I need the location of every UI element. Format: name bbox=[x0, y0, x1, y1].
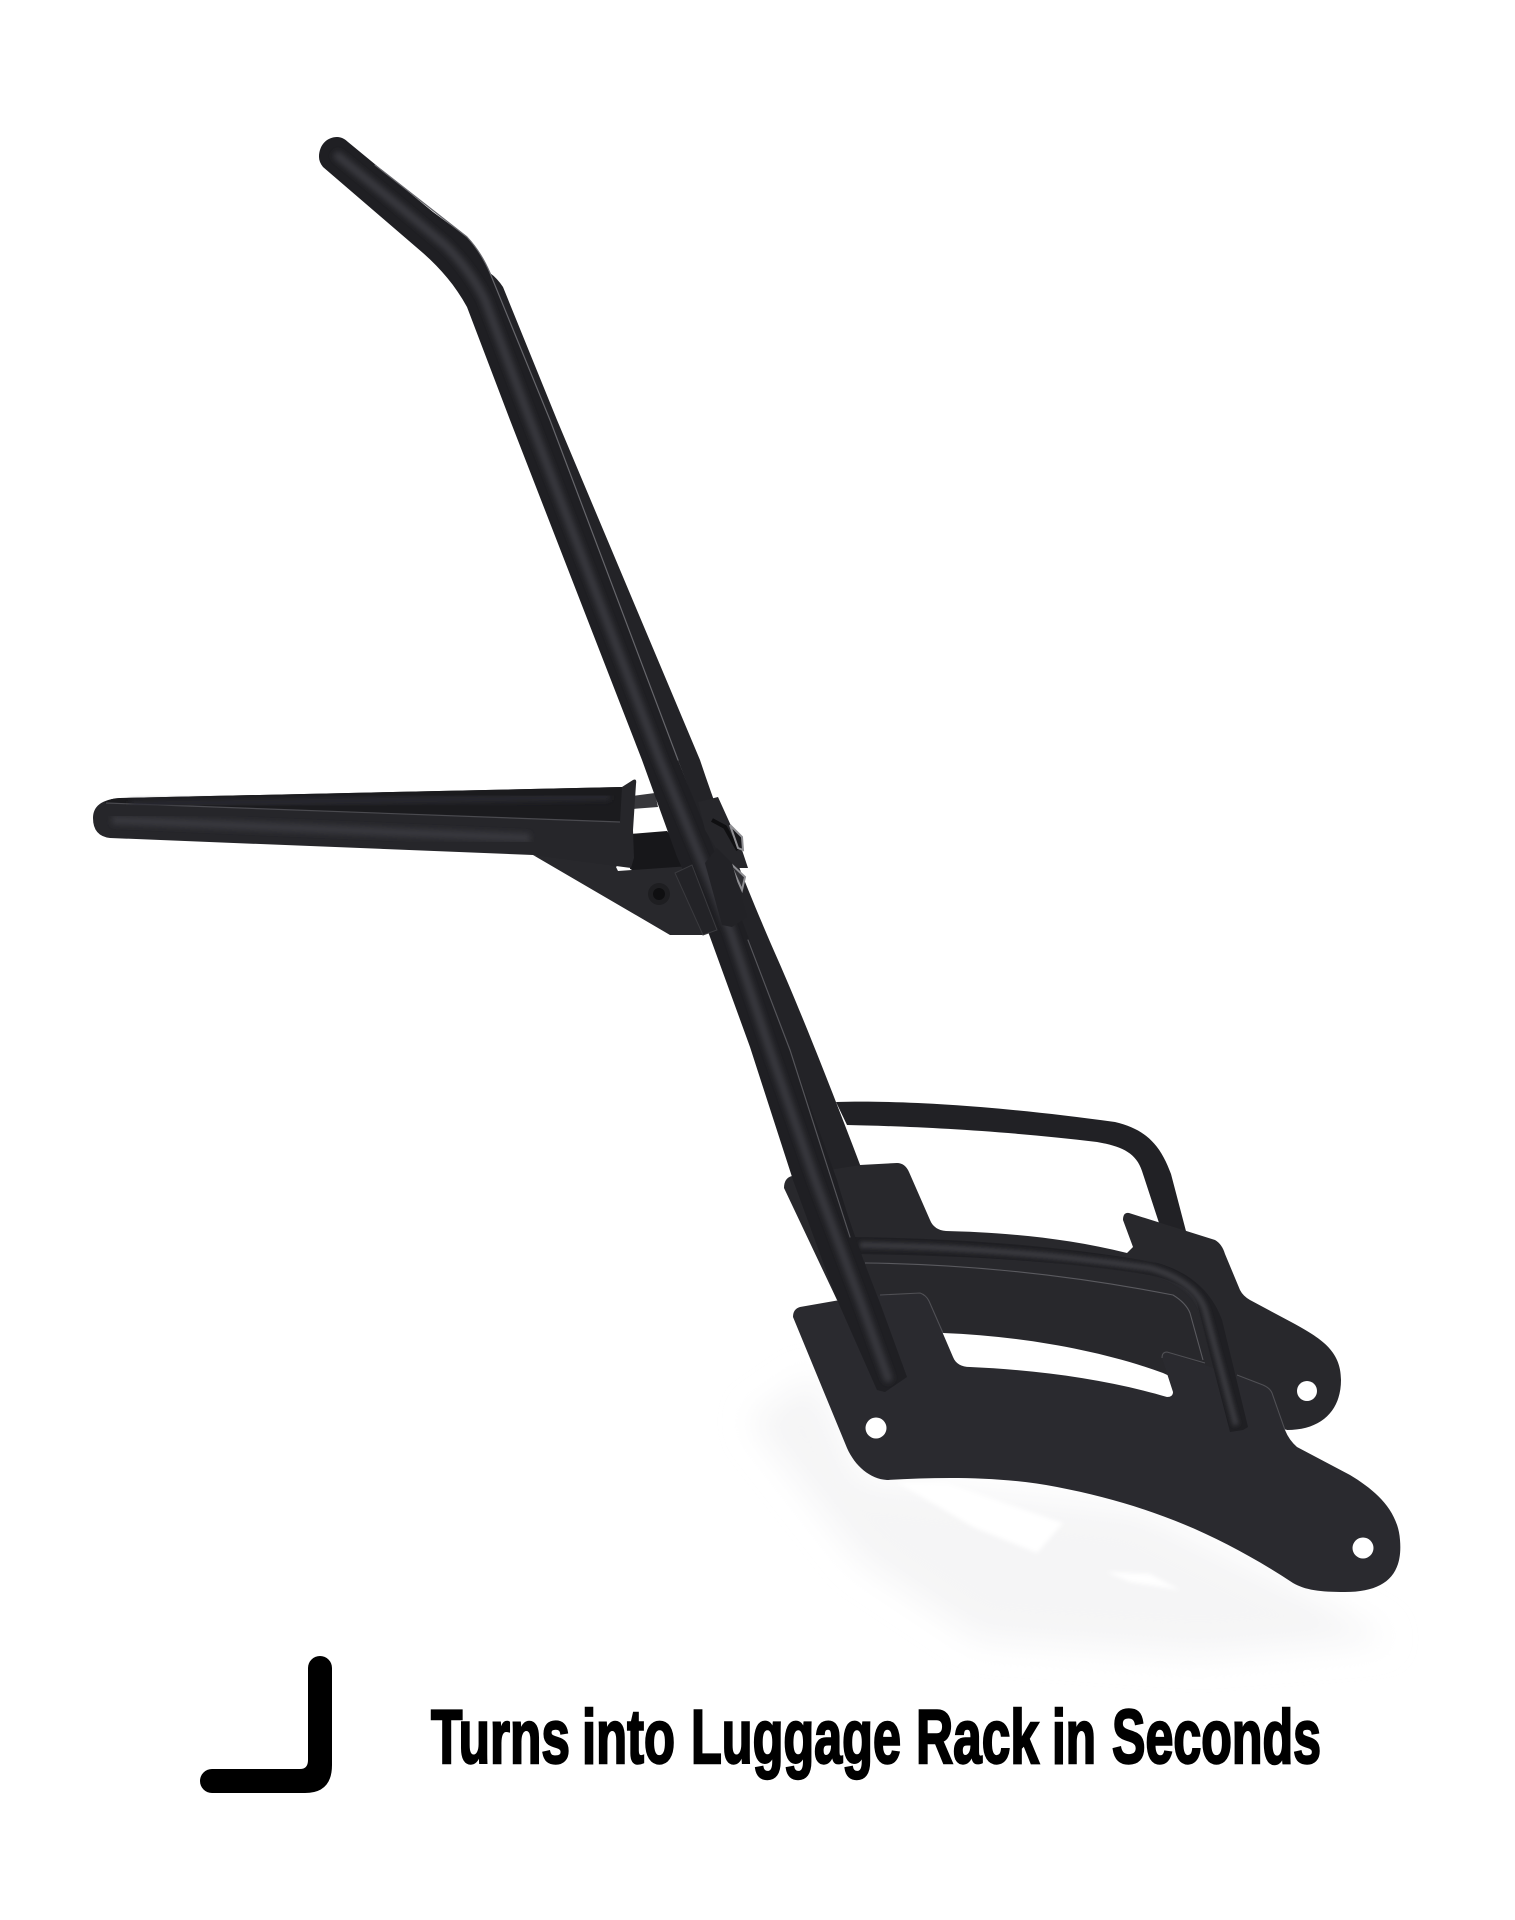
caption: in bbox=[1052, 1695, 1096, 1780]
caption: Rack bbox=[916, 1695, 1039, 1780]
rear main tube bbox=[490, 273, 862, 1237]
ground shadow bbox=[750, 1375, 1390, 1655]
arm highlight bbox=[106, 803, 620, 822]
clamp bolt upper bbox=[730, 825, 743, 850]
front plate hole left bbox=[866, 1418, 886, 1438]
caption bbox=[431, 1695, 1321, 1780]
icon: folded L-shaped rack bbox=[200, 1656, 332, 1793]
bracket gap bbox=[616, 863, 632, 871]
rear plate hole bbox=[1297, 1381, 1317, 1401]
bracket dark fitting bbox=[630, 831, 690, 872]
rear plate inner line bbox=[865, 1263, 1203, 1360]
front mounting plate bbox=[793, 1293, 1400, 1592]
caption: Seconds bbox=[1112, 1695, 1321, 1780]
caption: Luggage bbox=[691, 1695, 901, 1780]
clamp bolt lower bbox=[730, 863, 745, 890]
arm bracket bbox=[533, 855, 716, 935]
clamp left plate bbox=[675, 865, 717, 935]
tube clamp bbox=[675, 797, 748, 935]
clamp upper plate bbox=[698, 797, 748, 868]
arm support bar bbox=[632, 793, 658, 809]
front hoop tube bbox=[850, 1237, 1248, 1432]
bracket bolt bbox=[648, 883, 670, 905]
clamp slot bbox=[712, 820, 738, 850]
plate tab outline bbox=[880, 1293, 1285, 1430]
side luggage arm bbox=[93, 780, 716, 935]
rear hoop tube bbox=[836, 1102, 1187, 1235]
arm upper tube bbox=[104, 787, 622, 822]
clamp lower plate bbox=[705, 848, 747, 927]
front main tube bbox=[319, 137, 907, 1392]
rear mounting plate bbox=[784, 1163, 1341, 1430]
tube sheen bbox=[338, 156, 888, 1378]
product: luggage rack backrest bbox=[93, 137, 1400, 1592]
caption: into bbox=[582, 1695, 675, 1780]
front plate hole right bbox=[1352, 1538, 1374, 1558]
arm tube bbox=[93, 780, 636, 868]
caption: Turns bbox=[431, 1695, 570, 1780]
